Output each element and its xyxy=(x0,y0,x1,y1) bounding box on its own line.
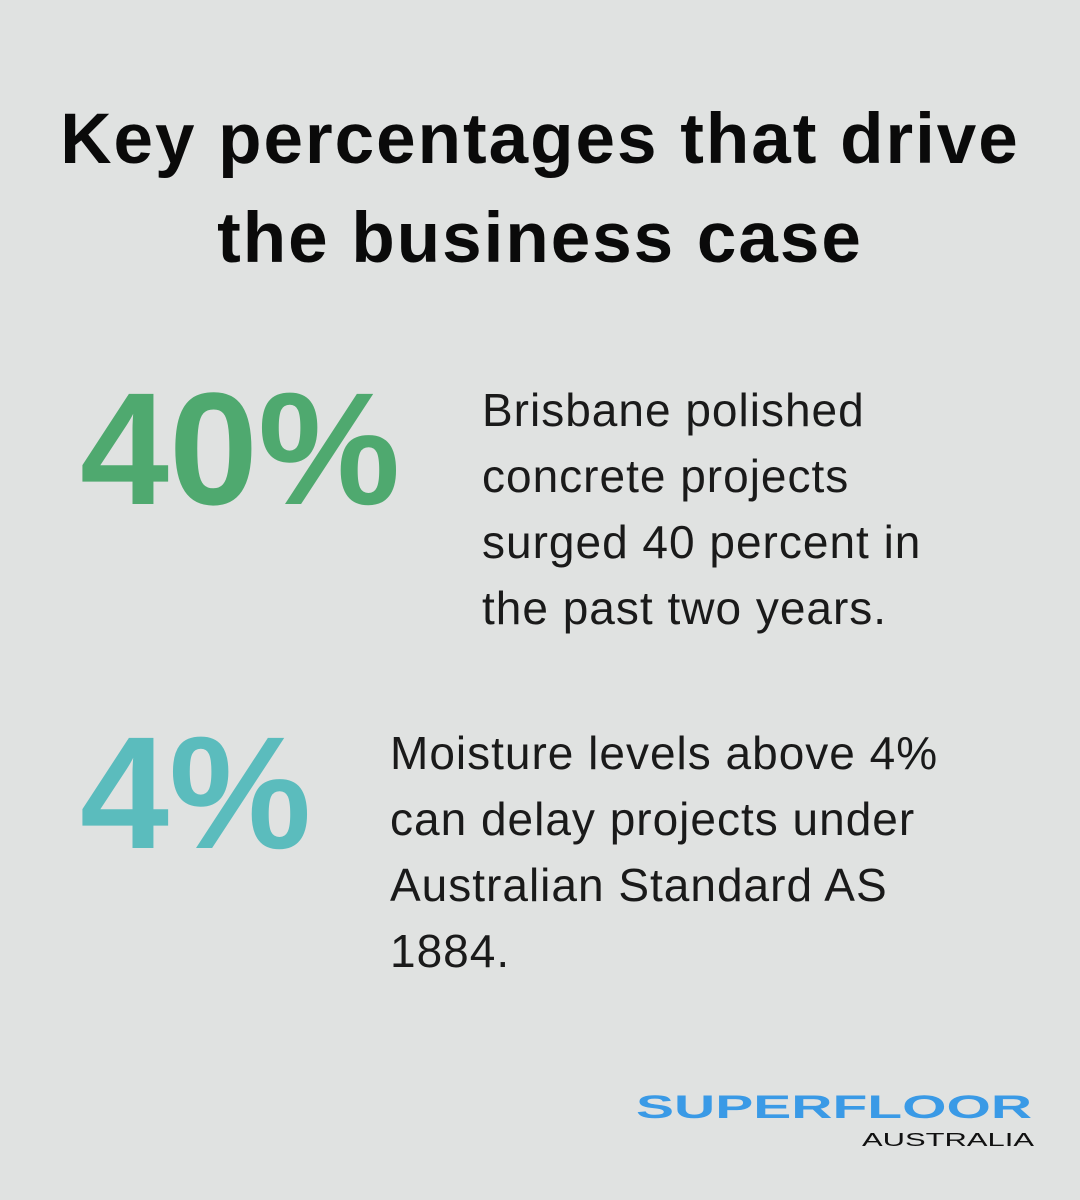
text: moisture levels xyxy=(390,727,938,977)
logo xyxy=(636,1089,1034,1150)
text: moisture levels: 1884. xyxy=(390,925,510,977)
stat: 4%: 4% xyxy=(80,703,311,882)
text: Brisbane projects: the past two years. xyxy=(482,582,887,634)
stat: 40%: 40% xyxy=(80,359,400,538)
logo: SUPERFLOOR xyxy=(636,1089,1032,1125)
text: moisture levels: Moisture levels above 4% xyxy=(390,727,938,779)
logo: AUSTRALIA xyxy=(862,1130,1034,1150)
title: Key percentages that drive xyxy=(60,100,1020,179)
title xyxy=(60,100,1020,278)
text: Brisbane projects: concrete projects xyxy=(482,450,849,502)
text: moisture levels: Australian Standard AS xyxy=(390,859,888,911)
text: Brisbane projects: Brisbane polished xyxy=(482,384,865,436)
title: the business case xyxy=(217,199,863,278)
text: Brisbane projects xyxy=(482,384,921,634)
text: moisture levels: can delay projects under xyxy=(390,793,915,845)
text: Brisbane projects: surged 40 percent in xyxy=(482,516,921,568)
